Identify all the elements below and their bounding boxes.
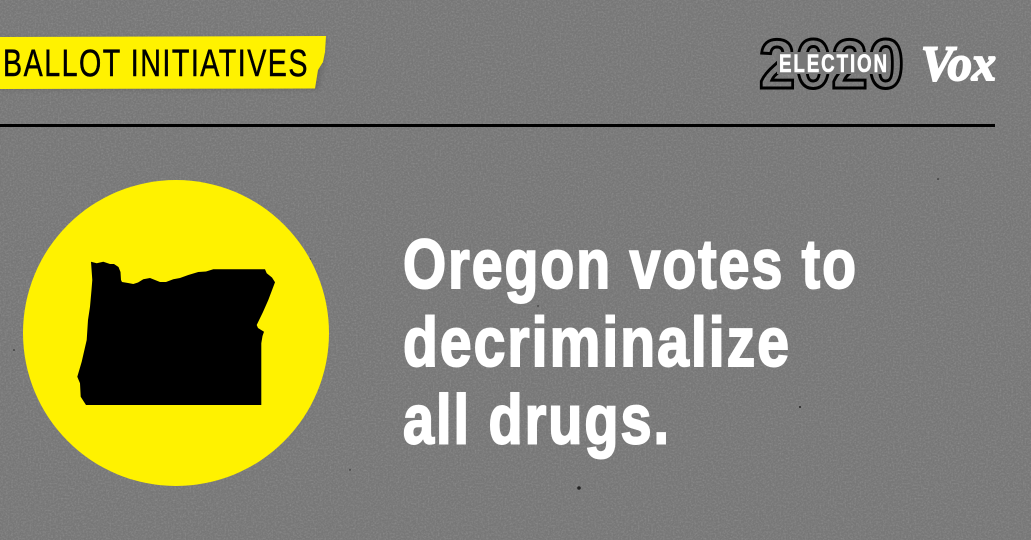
headline: Oregon votes to bbox=[403, 225, 858, 303]
headline: all drugs. bbox=[403, 380, 671, 458]
logo: 2020 election: ELECTION bbox=[779, 50, 889, 78]
icon: yellow circle with Oregon silhouette bbox=[23, 180, 329, 486]
headline: decriminalize bbox=[403, 303, 791, 381]
logo: Vox: Vox bbox=[921, 35, 996, 91]
icon: Oregon state map bbox=[77, 262, 275, 405]
logo: 2020 election: 2020 bbox=[759, 25, 904, 103]
headline bbox=[403, 225, 858, 458]
header rule bbox=[0, 124, 995, 127]
tape label: ballot initiatives bbox=[0, 36, 326, 90]
tape label: ballot initiatives: BALLOT INITIATIVES bbox=[3, 43, 309, 85]
